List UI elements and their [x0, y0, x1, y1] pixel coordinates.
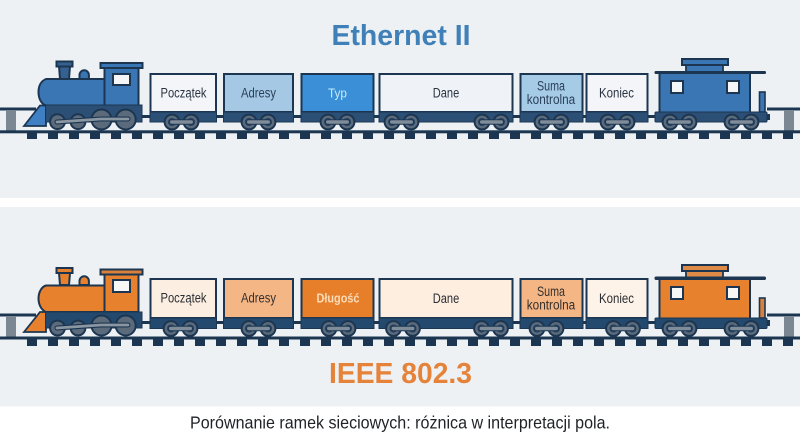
caboose: orange [654, 265, 770, 336]
wagon: Dane [379, 74, 513, 129]
locomotive: blue [24, 62, 142, 130]
caboose: blue [654, 59, 770, 129]
wagon: Długość [301, 279, 374, 336]
panel: IEEE 802.3 background [0, 207, 800, 406]
wagon: Suma kontrolna [520, 279, 583, 336]
wagon: Dane: Dane [433, 291, 459, 306]
panel: Ethernet II background [0, 0, 800, 198]
wagon: Adresy [224, 279, 294, 336]
wagon: Długość: Długość [316, 291, 360, 306]
title: IEEE 802.3: IEEE 802.3 [329, 358, 472, 390]
caption: Porównanie ramek sieciowych: różnica w interpretacji pola. [190, 412, 610, 432]
wagon: Suma kontrolna: Suma [537, 284, 565, 299]
wagon: Koniec [586, 74, 648, 129]
wagon: Suma kontrolna: kontrolna [527, 298, 576, 312]
wagon: Początek [150, 279, 216, 336]
locomotive: orange [24, 268, 142, 336]
title: Ethernet II: Ethernet II [332, 20, 470, 52]
wagon: Koniec: Koniec [599, 291, 634, 306]
wagon: Dane: Dane [433, 86, 459, 101]
wagon: Adresy: Adresy [241, 291, 276, 306]
track: IEEE 802.3 [0, 314, 800, 346]
wagon: Suma kontrolna: Suma [537, 78, 565, 94]
wagon: Koniec: Koniec [599, 86, 634, 101]
wagon: Koniec [586, 279, 648, 336]
wagon: Adresy: Adresy [241, 86, 276, 101]
wagon: Adresy [224, 74, 294, 129]
track: Ethernet II [0, 108, 800, 139]
wagon: Dane [379, 279, 513, 336]
wagon: Suma kontrolna: kontrolna [527, 92, 576, 107]
wagon: Początek: Początek [160, 291, 207, 306]
wagon: Typ: Typ [328, 86, 347, 101]
wagon: Typ [301, 74, 374, 129]
wagon: Suma kontrolna [520, 74, 583, 129]
wagon: Początek [150, 74, 216, 129]
wagon: Początek: Początek [160, 86, 207, 101]
